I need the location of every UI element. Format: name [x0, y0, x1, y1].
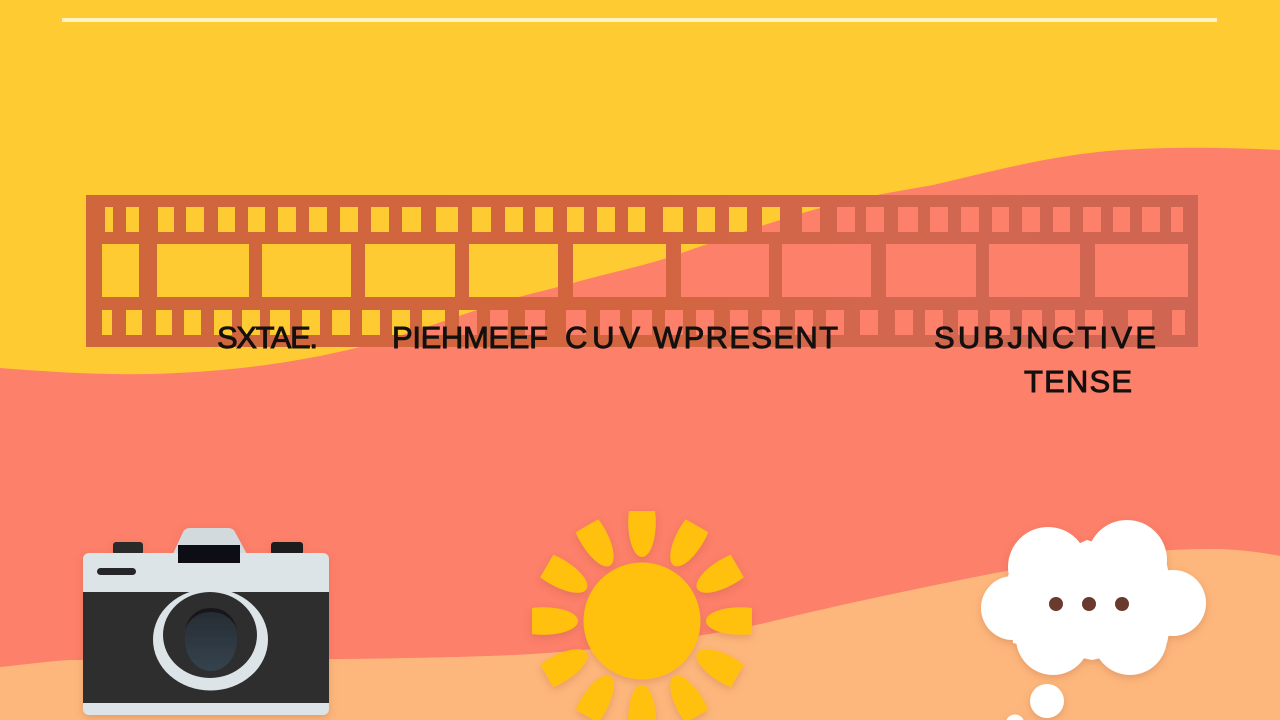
top divider line	[62, 18, 1217, 22]
icon: sun	[532, 511, 752, 720]
background: peach wave	[0, 549, 1280, 720]
label: TENSE: TENSE	[1024, 364, 1132, 399]
label: PIEHMEEF: PIEHMEEF	[392, 320, 548, 355]
icon: camera	[83, 528, 329, 715]
background: coral wave	[0, 148, 1280, 720]
label: SXTAE: SXTAE.	[217, 320, 318, 355]
film strip	[86, 195, 1198, 347]
label: WPRESENT: WPRESENT	[653, 320, 838, 355]
icon: thought cloud	[981, 520, 1206, 720]
label: SUBJNCTIVE: SUBJNCTIVE	[934, 320, 1156, 355]
label: CUV: CUV	[565, 320, 640, 355]
